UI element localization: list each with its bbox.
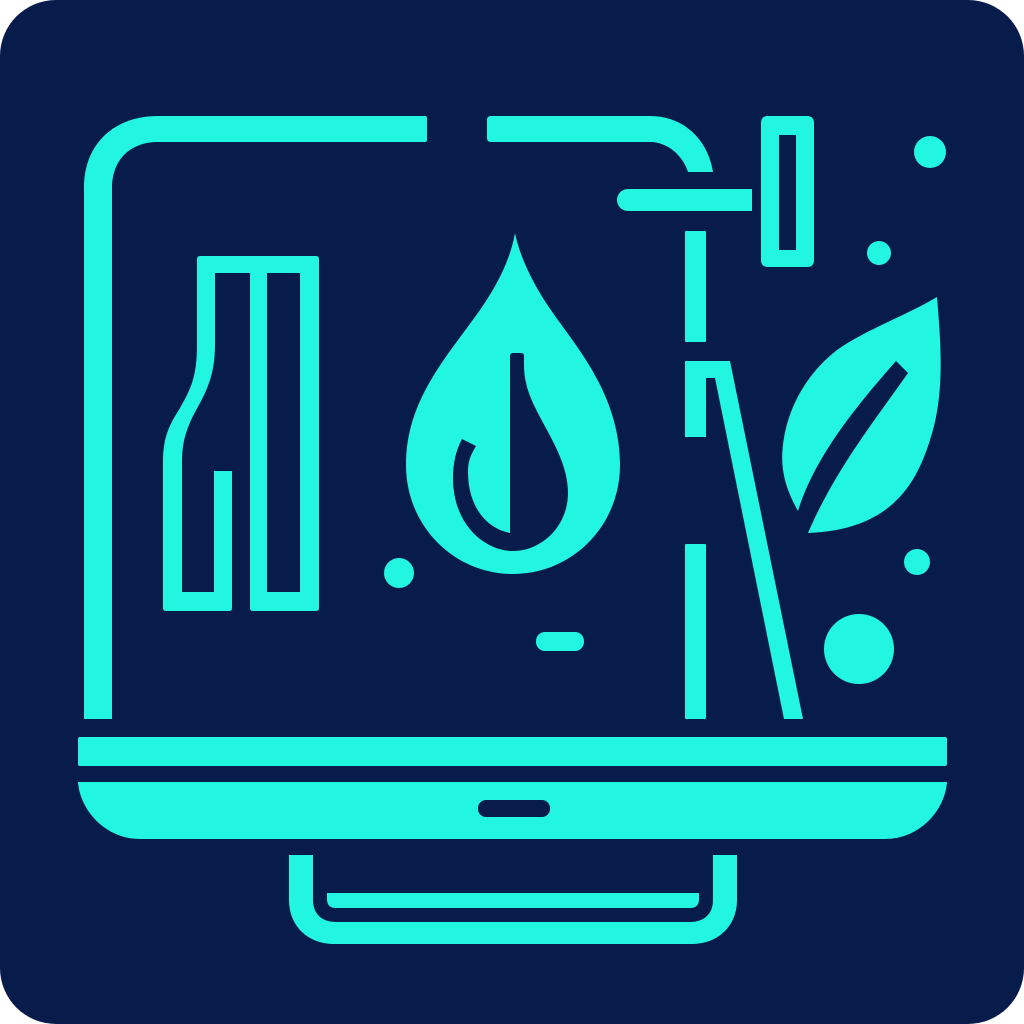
icon: water drop — [406, 233, 620, 574]
icon: pipe segments — [685, 231, 706, 719]
icon: tap head — [761, 116, 814, 267]
icon: monitor frame top right and tap spout — [487, 116, 713, 172]
icon: stand — [289, 855, 737, 944]
icon: laptop deck — [78, 737, 947, 766]
icon: leaf — [782, 297, 941, 533]
icon: laptop base — [78, 782, 947, 839]
icon: stand inner bar — [327, 893, 699, 908]
icon: tap handle — [617, 189, 752, 211]
icon: laptop notch — [478, 800, 550, 817]
icon: tall slanted stroke — [685, 361, 803, 719]
icon: dots — [384, 136, 946, 684]
icon: monitor frame left — [84, 116, 427, 719]
icon: bottle — [163, 256, 319, 611]
